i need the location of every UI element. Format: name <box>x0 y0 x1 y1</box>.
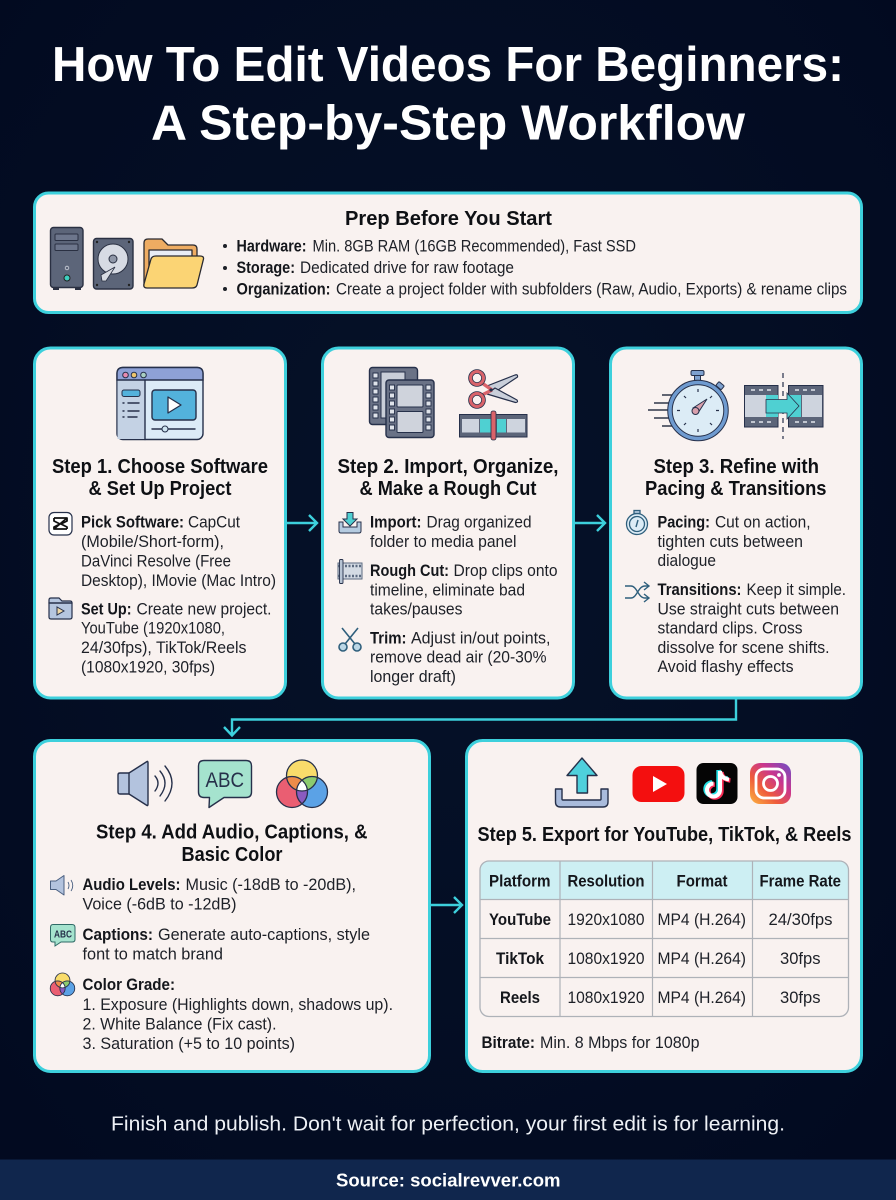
prep bullet list: Min. 8GB RAM (16GB Recommended), Fast SSD <box>312 236 636 256</box>
icon: ABC caption bubble: ABC <box>206 769 244 792</box>
text: transitions: Avoid flashy effects <box>658 657 794 676</box>
step 4 heading <box>96 820 368 866</box>
text: set up: YouTube (1920x1080, <box>81 618 225 638</box>
icon: speaker <box>118 761 172 806</box>
text: audio levels <box>82 875 356 914</box>
arrow: step 3 to step 4 <box>224 699 736 736</box>
icon: film transition <box>744 373 823 439</box>
text: color grade: 1. Exposure (Highlights down, shadows up). <box>82 995 393 1014</box>
arrow: step 1 to step 2 <box>287 515 317 531</box>
text: trim: Adjust in/out points, <box>411 628 550 648</box>
title <box>52 38 844 150</box>
table: export settings: MP4 (H.264) <box>658 988 746 1007</box>
text: pick software: (Mobile/Short-form), <box>81 532 224 551</box>
text: transitions: Use straight cuts between <box>658 600 839 618</box>
text: rough cut: Rough Cut: <box>370 561 449 580</box>
icon: scissors cutting film <box>460 372 527 440</box>
table: export settings: Reels <box>500 988 540 1007</box>
icon: computer tower <box>50 228 83 290</box>
step 4 heading: Basic Color <box>182 843 283 866</box>
text: transitions: dissolve for scene shifts. <box>658 638 830 657</box>
text: pick software: Desktop), IMovie (Mac Intro) <box>81 571 276 590</box>
icon: small colour wheel <box>50 973 75 996</box>
text: transitions: Keep it simple. <box>746 580 846 599</box>
text: import <box>370 512 532 551</box>
table: export settings: TikTok <box>496 949 545 968</box>
table: export settings: MP4 (H.264) <box>658 910 746 929</box>
text: set up: Set Up: <box>81 600 132 618</box>
table: export settings: YouTube <box>489 910 551 929</box>
icon: Instagram logo <box>750 763 791 804</box>
icon: film strip <box>338 560 362 584</box>
icon: colour wheel <box>276 760 328 808</box>
text: color grade: 3. Saturation (+5 to 10 points) <box>82 1034 295 1053</box>
text: rough cut: Drop clips onto <box>454 561 558 580</box>
step 2 heading: & Make a Rough Cut <box>360 477 537 500</box>
text: audio levels: Music (-18dB to -20dB), <box>186 875 356 894</box>
table: export settings: 1080x1920 <box>568 949 644 968</box>
step 2 heading: Step 2. Import, Organize, <box>338 455 558 478</box>
title: A Step-by-Step Workflow <box>151 96 746 150</box>
prep bullet list: Organization: <box>236 280 330 298</box>
table: export settings <box>480 861 848 1016</box>
table: export settings: 30fps <box>780 949 820 968</box>
footer bar <box>0 1160 896 1200</box>
icon: editing software window <box>117 368 203 440</box>
icon: shuffle transitions <box>625 582 649 602</box>
icon: folder <box>144 239 204 288</box>
footer bar: Source: socialrevver.com <box>336 1170 560 1190</box>
text: pacing: Cut on action, <box>715 512 810 532</box>
panel: step 4 <box>34 740 430 1072</box>
prep bullet list: Dedicated drive for raw footage <box>300 258 514 277</box>
text: trim: longer draft) <box>370 667 456 686</box>
panel: step 1 <box>34 348 286 698</box>
text: captions: Captions: <box>82 925 153 944</box>
table: export settings: 1080x1920 <box>568 988 644 1007</box>
text: trim: remove dead air (20-30% <box>370 648 547 666</box>
closing note: Finish and publish. Don't wait for perfection, your first edit is for learning. <box>111 1112 785 1136</box>
panel: prep before you start <box>34 193 862 312</box>
table: export settings: 30fps <box>780 988 820 1007</box>
prep heading: Prep Before You Start <box>345 207 552 230</box>
text: pick software: CapCut <box>188 512 240 532</box>
text: set up: 24/30fps), TikTok/Reels <box>81 638 246 657</box>
text: pacing <box>658 512 810 570</box>
icon: upload <box>556 758 608 807</box>
icon: film reels stack <box>370 368 434 438</box>
panel: step 3 <box>610 348 862 698</box>
text: color grade: Color Grade: <box>82 975 175 994</box>
text: audio levels: Voice (-6dB to -12dB) <box>82 894 236 914</box>
text: trim: Trim: <box>370 628 406 648</box>
text: audio levels: Audio Levels: <box>82 875 180 894</box>
text: transitions <box>658 580 846 676</box>
prep bullet list: Hardware: <box>236 236 306 256</box>
prep bullet list: Storage: <box>236 258 295 277</box>
step 3 heading <box>645 455 826 500</box>
table: export settings: 24/30fps <box>768 910 832 929</box>
text: pacing: Pacing: <box>658 512 710 532</box>
icon: capcut logo <box>49 512 72 535</box>
table: export settings: Resolution <box>568 872 644 890</box>
text: color grade: 2. White Balance (Fix cast). <box>82 1014 276 1034</box>
text: import: folder to media panel <box>370 532 516 551</box>
title: How To Edit Videos For Beginners: <box>52 38 844 92</box>
table: export settings: Platform <box>489 872 550 890</box>
text: set up: Create new project. <box>136 600 272 618</box>
text: set up <box>81 600 272 676</box>
text: pick software <box>81 512 276 590</box>
icon: small ABC bubble: ABC <box>54 930 72 940</box>
step 2 heading <box>338 455 558 500</box>
text: captions: Generate auto-captions, style <box>158 925 370 944</box>
table: export settings: MP4 (H.264) <box>658 949 746 968</box>
step 3 heading: Pacing & Transitions <box>645 477 826 500</box>
text: rough cut <box>370 561 558 618</box>
text: pacing: dialogue <box>658 551 716 570</box>
text: import: Drag organized <box>426 512 532 532</box>
icon: ABC caption bubble <box>198 760 252 808</box>
icon: stopwatch <box>648 370 726 438</box>
text: transitions: Transitions: <box>658 580 742 599</box>
table: export settings: Frame Rate <box>760 872 841 890</box>
text: captions: font to match brand <box>82 944 223 964</box>
prep bullet list <box>223 236 847 298</box>
step 1 heading <box>52 455 268 500</box>
text: color grade <box>82 975 393 1053</box>
arrow: step 4 to step 5 <box>431 897 462 913</box>
text: rough cut: takes/pauses <box>370 600 462 618</box>
step 4 heading: Step 4. Add Audio, Captions, & <box>96 820 368 844</box>
text: pick software: DaVinci Resolve (Free <box>81 552 231 570</box>
text: trim <box>370 628 550 686</box>
arrow: step 2 to step 3 <box>575 515 605 531</box>
text: rough cut: timeline, eliminate bad <box>370 580 525 600</box>
panel: step 5 <box>466 740 862 1072</box>
icon: small scissors <box>339 628 361 651</box>
step 1 heading: Step 1. Choose Software <box>52 455 268 478</box>
step 3 heading: Step 3. Refine with <box>654 455 819 478</box>
icon: YouTube logo <box>632 766 684 802</box>
icon: project folder <box>49 598 72 619</box>
text: pacing: tighten cuts between <box>658 532 803 551</box>
prep bullet list: Create a project folder with subfolders (Raw, Audio, Exports) & rename clips <box>336 280 847 298</box>
icon: small ABC bubble <box>50 924 75 946</box>
table: export settings: 1920x1080 <box>568 910 644 929</box>
text: bitrate: Min. 8 Mbps for 1080p <box>540 1033 700 1052</box>
table: export settings: Format <box>676 872 728 890</box>
text: transitions: standard clips. Cross <box>658 618 802 638</box>
text: set up: (1080x1920, 30fps) <box>81 658 215 676</box>
icon: import <box>339 512 361 533</box>
icon: hard drive <box>94 238 133 289</box>
text: pick software: Pick Software: <box>81 512 184 532</box>
text: bitrate: Bitrate: <box>482 1033 535 1052</box>
icon: small speaker <box>50 876 73 895</box>
icon: TikTok logo <box>696 763 738 804</box>
text: captions <box>82 925 370 964</box>
text: import: Import: <box>370 512 422 532</box>
panel: step 2 <box>322 348 574 698</box>
step 5 heading: Step 5. Export for YouTube, TikTok, & Reels <box>478 823 852 846</box>
icon: small stopwatch <box>626 510 648 534</box>
step 1 heading: & Set Up Project <box>88 477 232 500</box>
